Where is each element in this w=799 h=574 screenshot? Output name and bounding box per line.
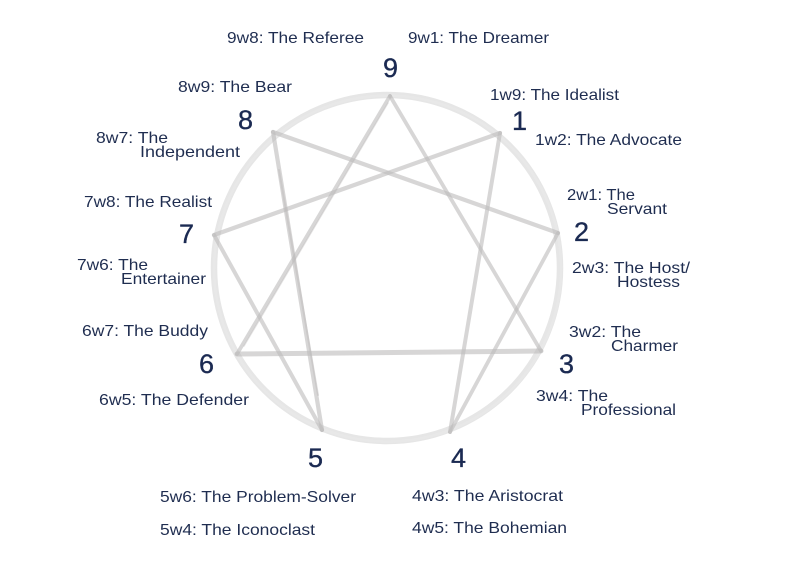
enneagram diagram — [214, 95, 561, 442]
type numbers: 2 — [574, 217, 589, 247]
wing labels: 3w2: The — [569, 324, 641, 341]
type numbers: 9 — [383, 53, 398, 83]
type numbers: 3 — [559, 349, 574, 379]
type numbers — [179, 53, 589, 473]
type numbers: 5 — [308, 443, 323, 473]
wing labels: 5w6: The Problem-Solver — [160, 489, 357, 506]
wing labels: 2w3: The Host/ — [572, 260, 691, 277]
wing labels: 4w5: The Bohemian — [412, 520, 567, 537]
wing labels: 2w1: The — [567, 187, 635, 204]
type numbers: 8 — [238, 105, 253, 135]
type numbers: 4 — [451, 443, 466, 473]
wing labels — [77, 30, 691, 539]
wing labels: Entertainer — [121, 271, 207, 288]
wing labels: 8w9: The Bear — [178, 79, 293, 96]
wing labels: 9w8: The Referee — [227, 30, 364, 47]
wing labels: Professional — [581, 402, 676, 419]
wing labels: 5w4: The Iconoclast — [160, 522, 316, 539]
wing labels: 9w1: The Dreamer — [408, 30, 550, 47]
wing labels: 4w3: The Aristocrat — [412, 488, 564, 505]
wing labels: 1w9: The Idealist — [490, 87, 620, 104]
wing labels: Charmer — [611, 338, 679, 355]
wing labels: Servant — [607, 201, 668, 218]
outer circle — [214, 95, 561, 442]
wing labels: Hostess — [617, 274, 680, 291]
wing labels: 6w7: The Buddy — [82, 323, 208, 340]
wing labels: Independent — [140, 144, 241, 161]
wing labels: 3w4: The — [536, 388, 608, 405]
wing labels: 8w7: The — [96, 130, 168, 147]
wing labels: 1w2: The Advocate — [535, 132, 682, 149]
triangle 9-3-6 — [237, 96, 541, 354]
wing labels: 7w6: The — [77, 257, 148, 274]
type numbers: 7 — [179, 219, 194, 249]
type numbers: 6 — [199, 349, 214, 379]
wing labels: 6w5: The Defender — [99, 392, 250, 409]
hexad 1-4-2-8-5-7 — [214, 132, 558, 432]
wing labels: 7w8: The Realist — [84, 194, 213, 211]
type numbers: 1 — [512, 106, 527, 136]
